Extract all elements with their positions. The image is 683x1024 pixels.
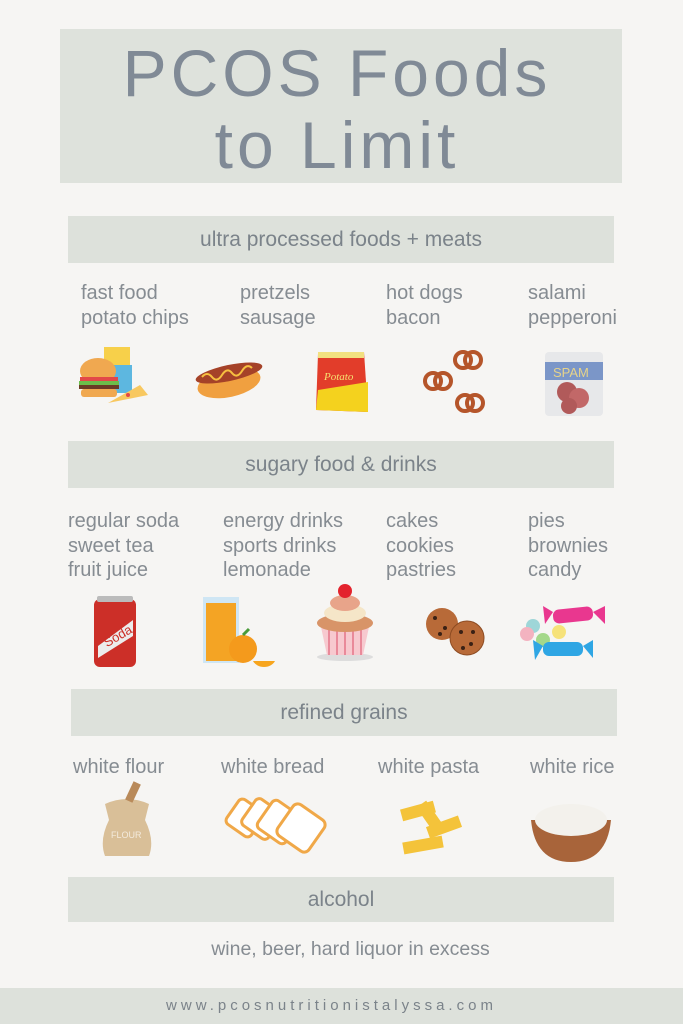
row1 text <box>81 282 617 328</box>
row2 text: pastries <box>386 559 456 581</box>
icon: potato chips: Potato <box>323 371 354 383</box>
row2 text: fruit juice <box>68 559 148 581</box>
row2 text: pies <box>528 510 565 532</box>
title: to Limit <box>215 108 459 182</box>
footer url: www.pcosnutritionistalyssa.com <box>166 997 497 1014</box>
row1 text: potato chips <box>81 306 189 328</box>
row1 text: sausage <box>240 306 316 328</box>
row2 text: energy drinks <box>223 510 343 532</box>
row2 text: lemonade <box>223 559 311 581</box>
row1 text: salami <box>528 282 586 304</box>
row1 text: pretzels <box>240 282 310 304</box>
section bar: refined grains: refined grains <box>280 701 408 724</box>
section bar: alcohol: alcohol <box>308 888 374 911</box>
icon: spam <box>545 352 603 416</box>
footer <box>0 988 683 1024</box>
icon: orange juice <box>203 597 275 667</box>
row3 text <box>73 756 614 778</box>
icon: soda: Soda <box>101 621 135 650</box>
icon: cupcake <box>317 584 373 661</box>
icon: spam: SPAM <box>553 365 589 380</box>
alcohol text: wine, beer, hard liquor in excess <box>211 938 490 960</box>
section bar: alcohol <box>68 877 614 922</box>
section bar: ultra processed: ultra processed foods + meats <box>200 228 482 251</box>
icon: flour: FLOUR <box>111 830 142 840</box>
section bar: sugary <box>68 441 614 488</box>
row3 text: white pasta <box>378 756 479 778</box>
title <box>123 36 551 182</box>
icon: hot dog <box>196 362 262 398</box>
row2 text: regular soda <box>68 510 179 532</box>
row3 text: white flour <box>73 756 164 778</box>
row2 text: candy <box>528 559 581 581</box>
row2 text: brownies <box>528 534 608 556</box>
icon: potato chips <box>316 352 368 412</box>
row1 text: bacon <box>386 306 440 328</box>
icon: fast food <box>79 347 148 403</box>
title box <box>60 29 622 183</box>
section bar: refined grains <box>71 689 617 736</box>
row3 text: white bread <box>221 756 324 778</box>
row1 text: fast food <box>81 282 158 304</box>
icon: soda <box>94 596 136 667</box>
section bar: sugary: sugary food & drinks <box>245 453 437 476</box>
icon: rice <box>531 820 611 862</box>
row3 text: white rice <box>530 756 614 778</box>
row1 text: hot dogs <box>386 282 463 304</box>
row2 text <box>68 510 608 581</box>
row1 text: pepperoni <box>528 306 617 328</box>
icon: bread <box>224 797 327 854</box>
icon: candy <box>520 606 605 660</box>
row2 text: cookies <box>386 534 454 556</box>
row2 text: sweet tea <box>68 534 154 556</box>
row2 text: cakes <box>386 510 438 532</box>
icon: pretzels <box>423 350 485 413</box>
icon: cookies <box>426 608 484 656</box>
section bar: ultra processed <box>68 216 614 263</box>
row2 text: sports drinks <box>223 534 336 556</box>
icon: pasta <box>400 800 462 854</box>
icon: flour <box>102 781 152 856</box>
title: PCOS Foods <box>123 36 551 110</box>
